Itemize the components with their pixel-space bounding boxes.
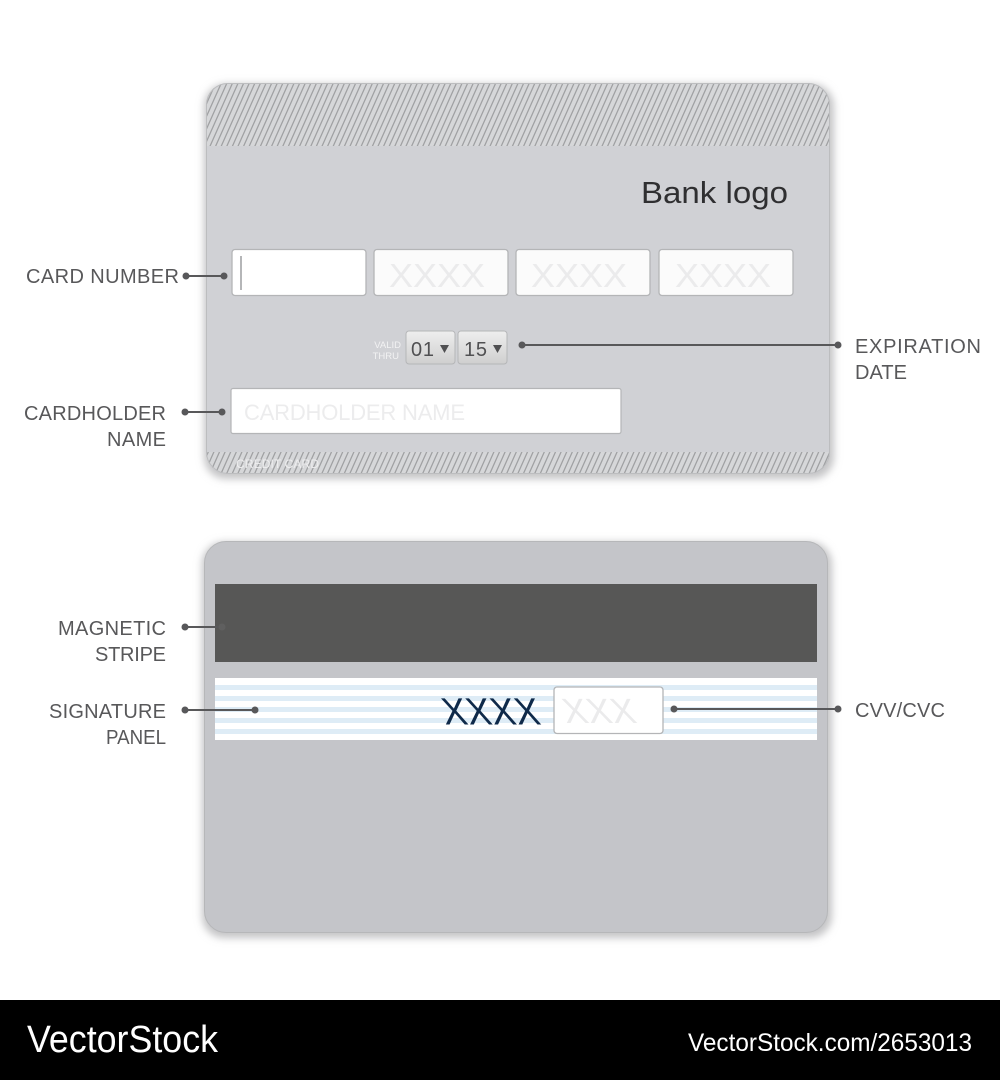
- label: cardholder name: [24, 403, 226, 451]
- credit card caption: CREDIT CARD: [236, 457, 319, 471]
- label: cardholder name: NAME: [107, 429, 166, 451]
- cvv field: XXX: [558, 691, 640, 731]
- month select: 01: [411, 339, 434, 361]
- bank logo: Bank logo: [641, 175, 788, 210]
- label: magnetic stripe: MAGNETIC: [58, 618, 166, 640]
- signature mark: XXXX: [438, 691, 544, 733]
- signature panel: [215, 678, 817, 740]
- top hatch band: [206, 83, 830, 146]
- valid thru label: [373, 340, 401, 362]
- card number field 2: [374, 250, 508, 296]
- label: cvv/cvc: CVV/CVC: [855, 700, 945, 722]
- label: expiration date: EXPIRATION: [855, 336, 981, 358]
- month select: [406, 331, 455, 364]
- label: signature panel: PANEL: [106, 727, 166, 749]
- label: magnetic stripe: STRIPE: [95, 644, 166, 666]
- card number field 3: XXXX: [531, 257, 627, 294]
- label: expiration date: [518, 336, 981, 384]
- card number field 1: [232, 250, 366, 296]
- card number field 4: XXXX: [675, 257, 771, 294]
- label: signature panel: SIGNATURE: [49, 701, 166, 723]
- cardholder name field: [231, 388, 621, 434]
- label: signature panel: [49, 701, 258, 749]
- cardholder name field: CARDHOLDER NAME: [244, 400, 465, 425]
- card number field 3: [516, 250, 650, 296]
- watermark footer bar: [0, 1000, 1000, 1080]
- label: magnetic stripe: [58, 618, 226, 666]
- bottom hatch band: [206, 452, 830, 474]
- card number field 2: XXXX: [389, 257, 485, 294]
- label: cardholder name: CARDHOLDER: [24, 403, 166, 425]
- cvv field: [554, 687, 663, 734]
- year select: 15: [464, 339, 487, 361]
- watermark brand: VectorStock: [27, 1019, 219, 1061]
- label: card number: CARD NUMBER: [26, 266, 179, 288]
- label: cvv/cvc: [670, 700, 945, 722]
- magnetic stripe: [215, 584, 817, 662]
- valid thru label: THRU: [373, 351, 399, 362]
- year select: [458, 331, 507, 364]
- valid thru label: VALID: [374, 340, 401, 351]
- back card: [202, 542, 832, 938]
- front card: [204, 83, 834, 479]
- card number field 4: [659, 250, 793, 296]
- label: expiration date: DATE: [855, 362, 907, 384]
- watermark url: VectorStock.com/2653013: [688, 1029, 972, 1057]
